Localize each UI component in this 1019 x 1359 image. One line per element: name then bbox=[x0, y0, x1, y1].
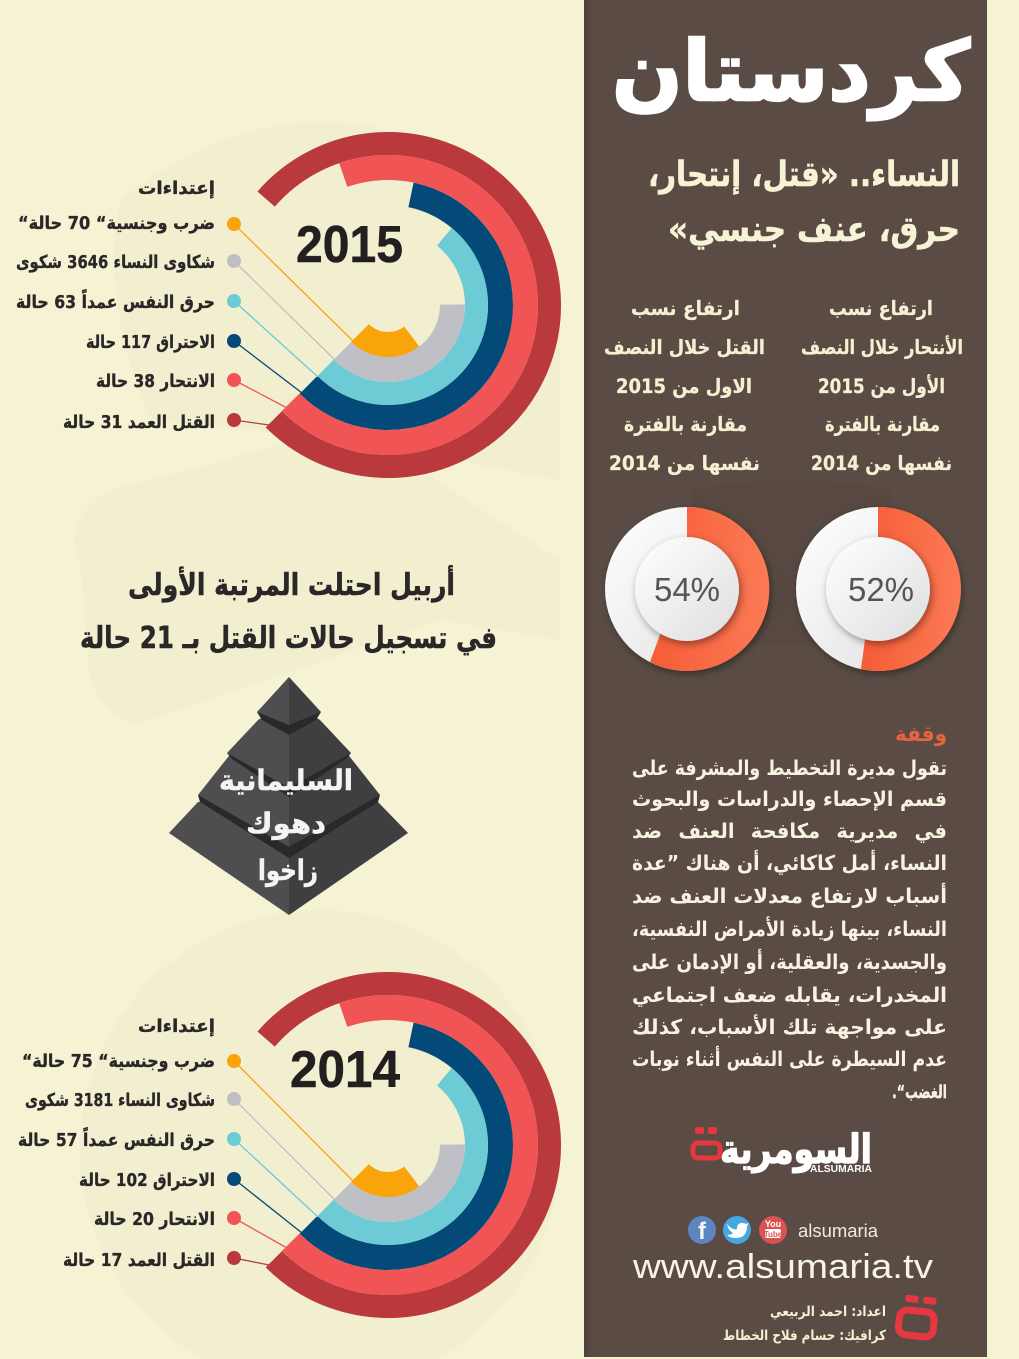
text block: suicide increase bbox=[801, 297, 963, 475]
pyramid labels: السليمانية bbox=[219, 764, 353, 797]
text block: suicide increase: الأول من 2015 bbox=[818, 373, 945, 398]
body paragraph: على مواجهة تلك الأسباب، كذلك bbox=[632, 1013, 947, 1039]
body paragraph: عدم السيطرة على النفس أثناء نوبات bbox=[632, 1045, 947, 1071]
chart: 2015 concentric rings bbox=[160, 77, 616, 533]
icon: youtube bbox=[759, 1216, 787, 1244]
chart: 2014 concentric rings bbox=[160, 917, 616, 1359]
body paragraph: والجسدية، والعقلية، أو الإدمان على bbox=[632, 948, 947, 974]
legend 2014: حرق النفس عمداً 57 حالة bbox=[18, 1127, 215, 1151]
pause heading: وقفة bbox=[895, 722, 947, 746]
year 2014: 2014 bbox=[290, 1041, 400, 1099]
legend 2014: الانتحار 20 حالة bbox=[94, 1209, 215, 1230]
icon: red logo mark bbox=[898, 1294, 937, 1338]
text block: suicide increase: مقارنة بالفترة bbox=[825, 413, 940, 436]
text block: suicide increase: نفسها من 2014 bbox=[811, 452, 952, 475]
donut chart: 52% bbox=[796, 507, 961, 671]
text block: suicide increase: الأنتحار خلال النصف bbox=[801, 334, 963, 359]
panel: dark right column bbox=[584, 0, 987, 1357]
social handle: alsumaria bbox=[798, 1221, 879, 1241]
legend 2015: الاحتراق 117 حالة bbox=[86, 332, 215, 353]
icon: facebook: f bbox=[698, 1218, 707, 1245]
text block: killing increase: القتل خلال النصف bbox=[604, 336, 765, 359]
body paragraph: المخدرات، يقابله ضعف اجتماعي bbox=[632, 983, 947, 1007]
body paragraph: قسم الإحصاء والدراسات والبحوث bbox=[632, 787, 947, 811]
credits: كرافيك: حسام فلاح الخطاط bbox=[723, 1328, 887, 1344]
text block: killing increase: مقارنة بالفترة bbox=[624, 413, 747, 436]
donut chart: 52%: 52% bbox=[848, 571, 914, 608]
legend 2014: ضرب وجنسية“ 75 حالة“ bbox=[22, 1051, 215, 1072]
logo: Alsumaria bbox=[693, 1127, 872, 1175]
legend 2015: الانتحار 38 حالة bbox=[96, 371, 215, 392]
text block: killing increase: الاول من 2015 bbox=[616, 375, 752, 398]
logo: Alsumaria: السومرية bbox=[720, 1127, 872, 1173]
legend 2014: القتل العمد 17 حالة bbox=[63, 1250, 215, 1271]
icon: youtube: You bbox=[765, 1219, 781, 1229]
body paragraph: أسباب لارتفاع معدلات العنف ضد bbox=[632, 882, 947, 908]
legend 2015: إعتداءات bbox=[138, 178, 215, 199]
legend dots and leader lines 2014 bbox=[227, 1054, 354, 1265]
legend 2015: حرق النفس عمداً 63 حالة bbox=[16, 289, 215, 313]
heading: Erbil first bbox=[80, 565, 497, 656]
logo: Alsumaria: ALSUMARIA bbox=[810, 1164, 872, 1175]
pyramid bbox=[169, 677, 408, 915]
donut chart: 54% bbox=[605, 507, 769, 671]
body paragraph: النساء، أمل كاكائي، أن هناك ”عدة bbox=[632, 849, 947, 875]
legend 2014: شكاوى النساء 3181 شكوى bbox=[25, 1090, 215, 1111]
year 2015: 2015 bbox=[296, 216, 403, 274]
subtitle: حرق، عنف جنسي» bbox=[668, 210, 960, 250]
legend 2015: شكاوى النساء 3646 شكوى bbox=[16, 252, 215, 273]
donut chart: 54%: 54% bbox=[654, 571, 720, 608]
body paragraph: النساء، بينها زيادة الأمراض النفسية، bbox=[632, 915, 947, 941]
legend 2014: إعتداءات bbox=[138, 1016, 215, 1037]
subtitle: النساء.. «قتل، إنتحار، bbox=[648, 155, 960, 195]
body paragraph: في مديرية مكافحة العنف ضد bbox=[632, 819, 947, 843]
body paragraph bbox=[632, 756, 947, 1103]
legend 2015: ضرب وجنسية“ 70 حالة“ bbox=[18, 213, 215, 234]
pyramid labels: زاخوا bbox=[258, 854, 318, 887]
text block: killing increase: ارتفاع نسب bbox=[631, 297, 740, 320]
text block: killing increase: نفسها من 2014 bbox=[609, 452, 760, 475]
legend 2015: القتل العمد 31 حالة bbox=[63, 412, 215, 433]
subtitle bbox=[648, 155, 960, 250]
legend 2015 bbox=[16, 178, 215, 433]
website: www.alsumaria.tv bbox=[632, 1248, 933, 1286]
background watermark shapes bbox=[74, 122, 560, 1359]
heading: Erbil first: في تسجيل حالات القتل بـ 21 حالة bbox=[80, 621, 497, 656]
legend 2014: الاحتراق 102 حالة bbox=[79, 1170, 215, 1191]
text block: killing increase bbox=[604, 297, 765, 475]
credits bbox=[723, 1304, 887, 1344]
icon: facebook bbox=[688, 1216, 716, 1245]
pyramid labels bbox=[219, 764, 353, 887]
body paragraph: تقول مديرة التخطيط والمشرفة على bbox=[632, 756, 947, 780]
icon: youtube: Tube bbox=[764, 1230, 783, 1239]
pyramid labels: دهوك bbox=[246, 807, 326, 840]
text block: suicide increase: ارتفاع نسب bbox=[829, 297, 933, 320]
heading: Erbil first: أربيل احتلت المرتبة الأولى bbox=[128, 565, 455, 603]
icon: twitter bbox=[723, 1216, 751, 1244]
credits: اعداد: احمد الربيعي bbox=[770, 1304, 886, 1320]
legend 2014 bbox=[18, 1016, 215, 1271]
legend dots and leader lines 2015 bbox=[227, 217, 354, 427]
body paragraph: الغضب“. bbox=[892, 1082, 947, 1103]
